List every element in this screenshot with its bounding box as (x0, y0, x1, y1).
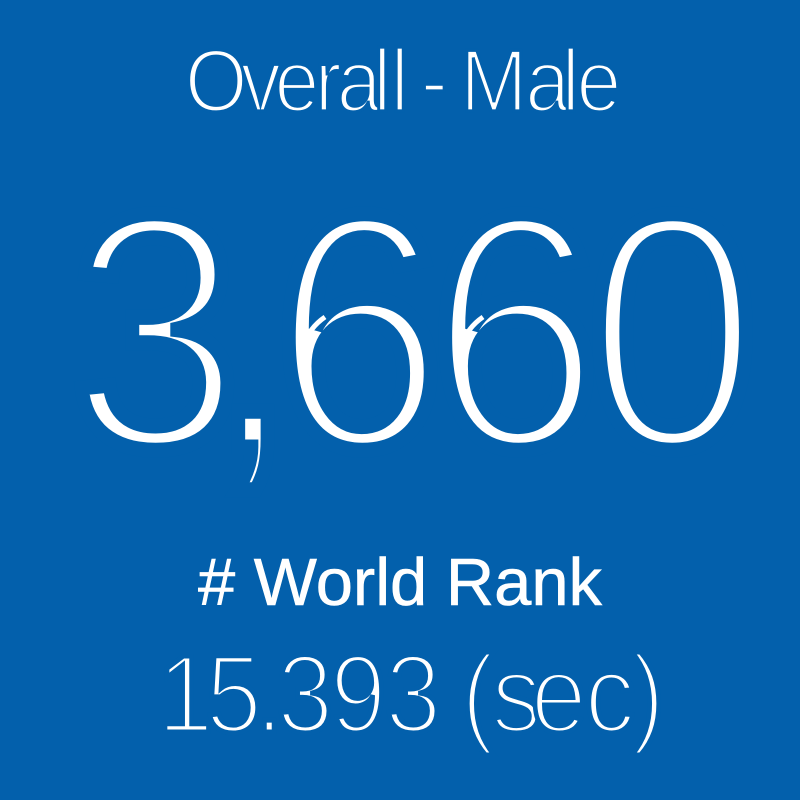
time value: 15.393 (sec) (157, 634, 665, 756)
main value: 3,660 (70, 145, 758, 519)
metric label: # World Rank (198, 545, 602, 620)
title: Overall - Male (185, 32, 621, 130)
